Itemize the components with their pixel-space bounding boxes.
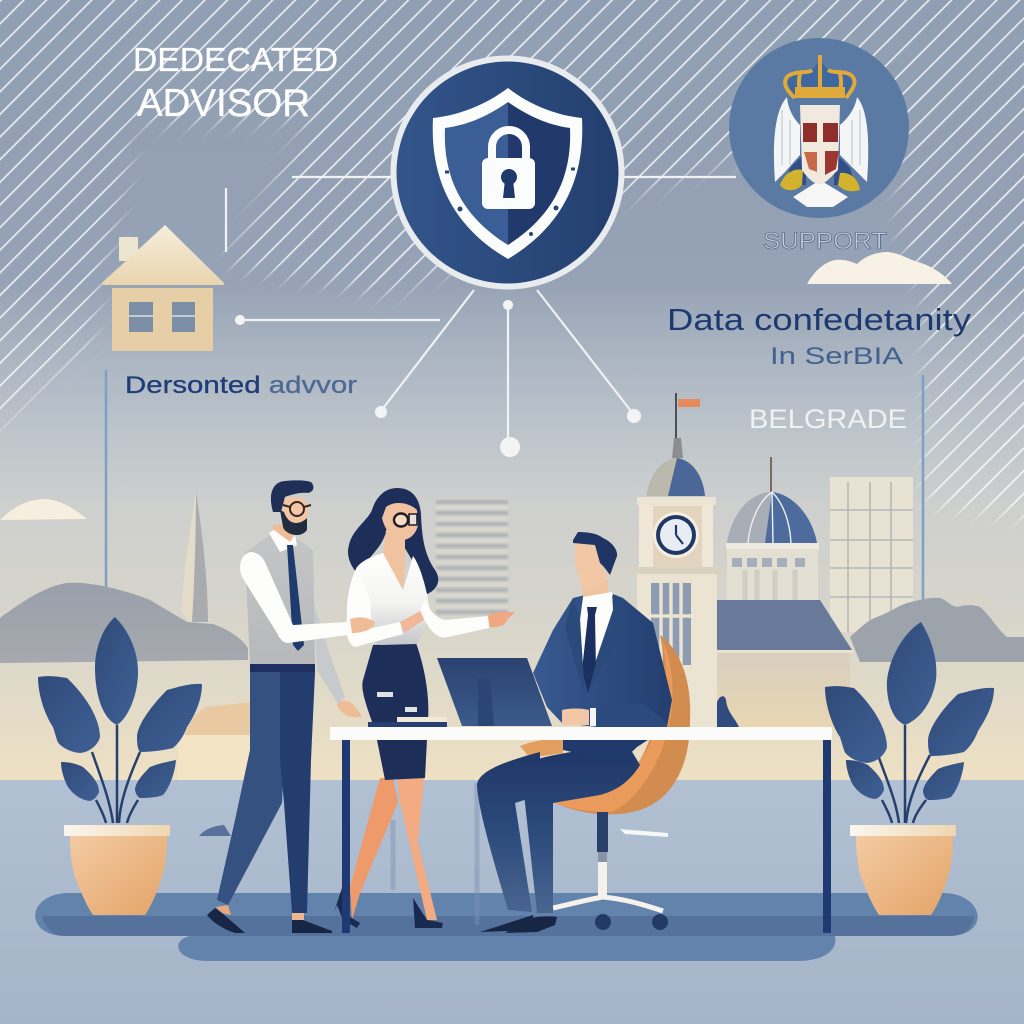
collar (269, 530, 297, 552)
person: man standing (207, 480, 362, 933)
vertical guide lines (106, 370, 923, 628)
vest (245, 535, 315, 664)
striped window tower (436, 498, 508, 614)
person: woman standing (334, 488, 515, 928)
crown (785, 60, 854, 98)
clock tower (630, 393, 724, 727)
plant: right (825, 622, 994, 915)
hand (562, 708, 589, 725)
hair (348, 488, 438, 594)
desk (330, 658, 832, 933)
shield (433, 88, 582, 259)
heading: dedicated advisor: DEDECATED (133, 41, 338, 78)
near leg (523, 745, 640, 913)
tie (287, 545, 304, 651)
back leg (350, 778, 398, 920)
glasses (394, 514, 417, 526)
papers on desk (368, 707, 447, 727)
jacket (533, 592, 672, 727)
laptop (437, 658, 552, 726)
right arm (420, 600, 489, 638)
shield (800, 105, 840, 184)
heading: dedicated advisor (133, 41, 338, 125)
icon: shield with padlock (390, 56, 624, 290)
label: belgrade: BELGRADE (749, 404, 907, 434)
connector lines (226, 177, 736, 457)
floor shadow (35, 783, 978, 961)
icon: Serbian coat of arms (729, 38, 909, 218)
plant: left (38, 617, 202, 915)
icon: cloud (807, 252, 952, 284)
right hill (850, 598, 1024, 662)
left hand (400, 610, 424, 633)
head (282, 497, 308, 528)
far leg (477, 752, 540, 912)
clock (653, 512, 699, 558)
right sleeve (596, 703, 667, 727)
far hand (337, 701, 362, 717)
shoes (480, 915, 533, 932)
wings (774, 97, 800, 182)
shoes (216, 905, 231, 915)
label: support: SUPPORT (763, 228, 887, 255)
small rock (199, 825, 231, 836)
skyline left (0, 492, 253, 780)
left arm (346, 567, 403, 647)
dome (703, 457, 853, 727)
Belgrade buildings (630, 393, 1024, 727)
text: personal advisor: Dersonted advvor (125, 372, 357, 399)
neck (273, 525, 292, 548)
shoes (334, 887, 360, 928)
heading: dedicated advisor: ADVISOR (137, 82, 310, 125)
front leg (397, 778, 437, 920)
icon: house (102, 225, 224, 351)
neck (582, 580, 608, 610)
shirt (580, 592, 613, 667)
glass building (830, 477, 913, 632)
text: data confidentiality: Data confedetanity (667, 302, 972, 337)
text: data confidentiality: In SerBIA (770, 343, 903, 370)
head (575, 543, 607, 592)
padlock (482, 130, 535, 209)
lapels (565, 598, 585, 697)
near arm (240, 552, 348, 643)
face (382, 503, 418, 540)
right hand (488, 612, 515, 627)
skirt (362, 643, 428, 780)
far arm (313, 600, 345, 704)
legs (217, 672, 284, 905)
blouse (352, 553, 430, 645)
tie (582, 607, 597, 693)
person: seated man (477, 532, 672, 933)
text: data confidentiality (667, 302, 972, 370)
seated man chair (520, 635, 690, 930)
man's hand on arm (350, 617, 375, 633)
glasses (283, 502, 311, 516)
